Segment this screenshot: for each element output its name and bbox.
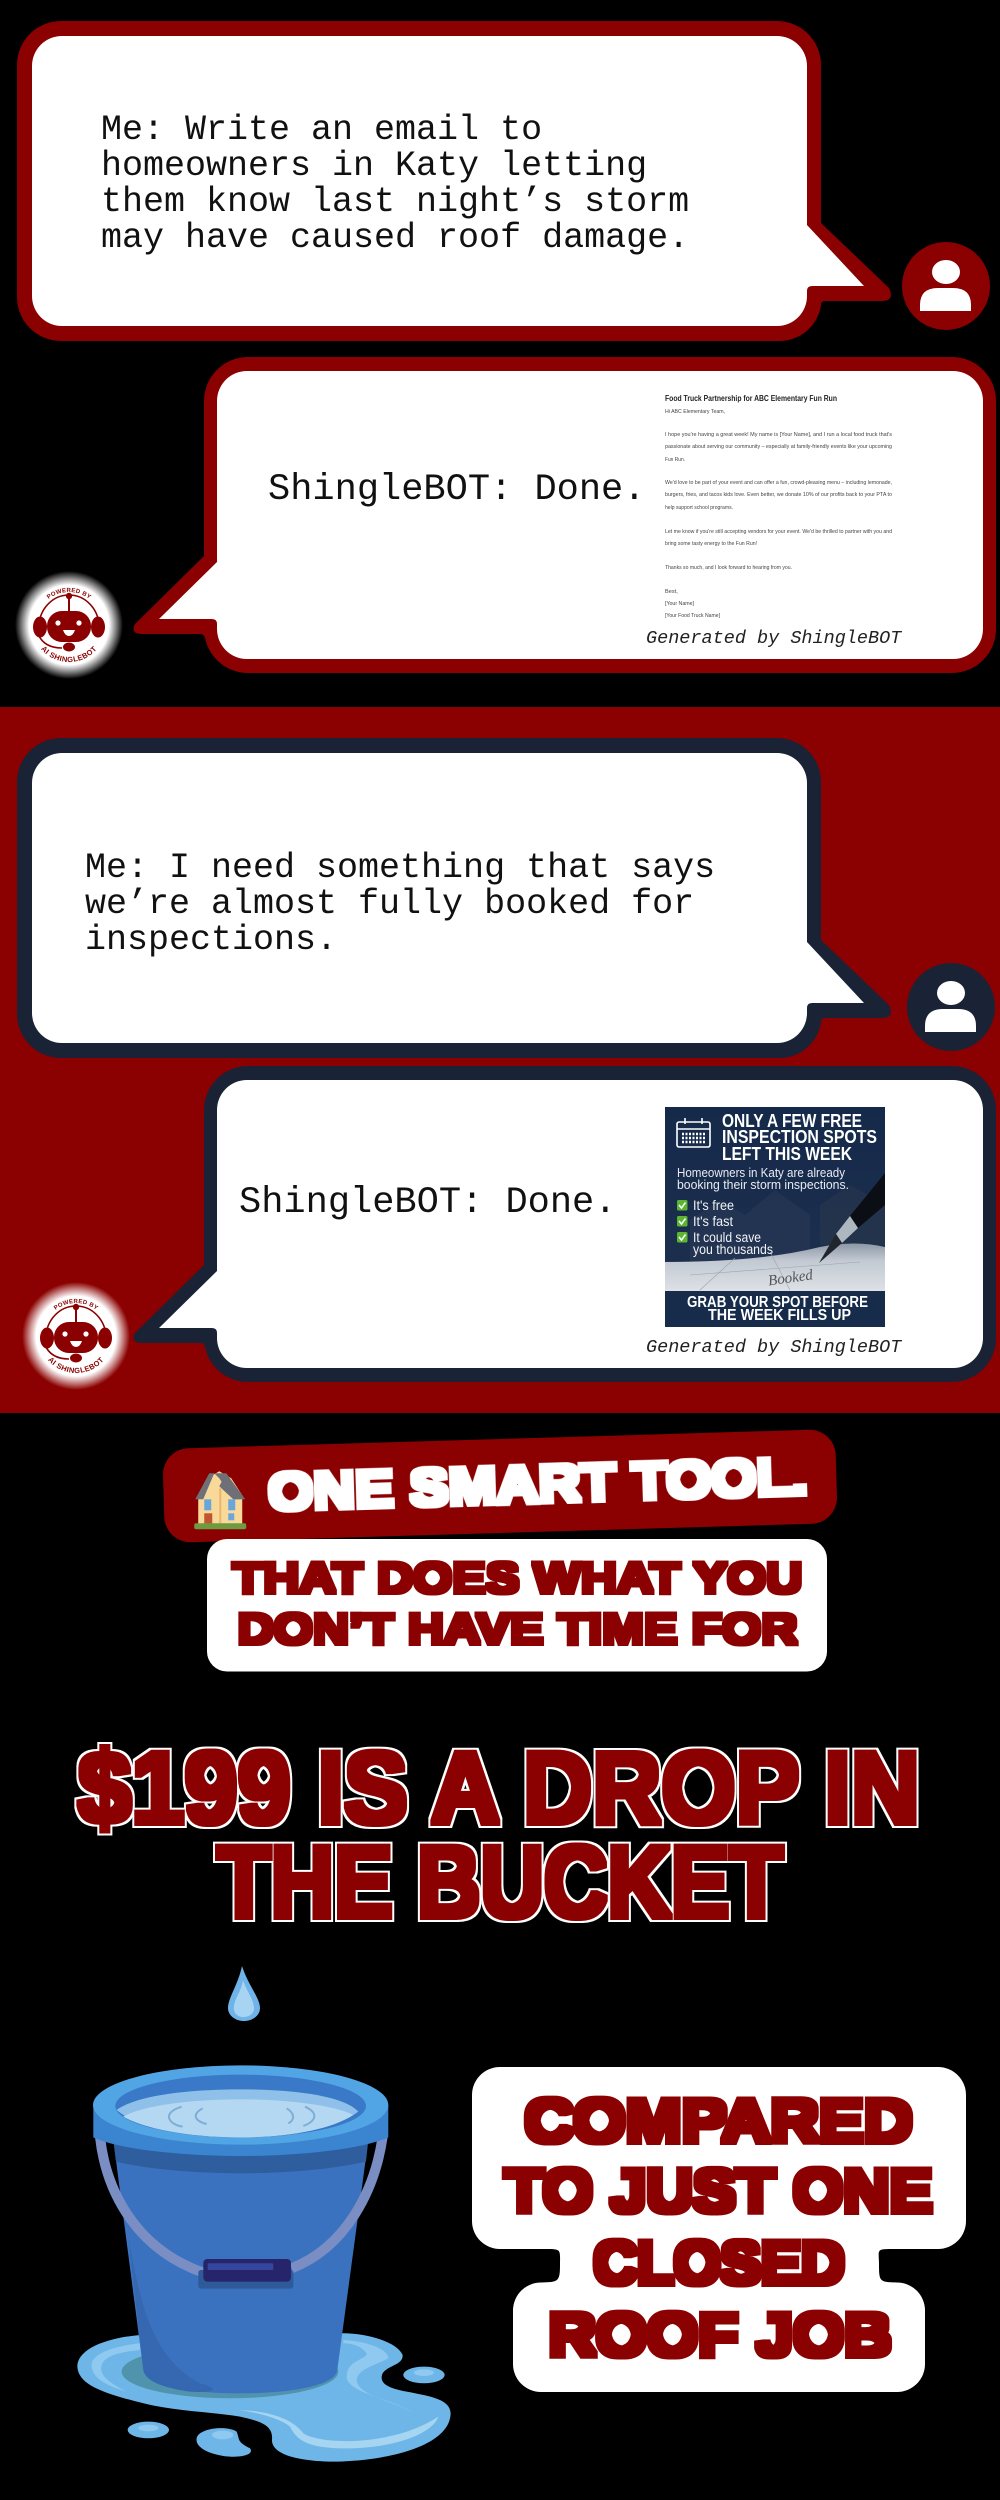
icon: ShingleBOT badge on red: AI SHINGLEBOT [48, 1356, 103, 1374]
callout: compared to one roof job [472, 2067, 966, 2392]
subtitle text [232, 1554, 802, 1654]
paper [665, 1244, 885, 1292]
ad image [665, 1107, 885, 1327]
email document: [Your Food Truck Name] [665, 613, 720, 619]
callout text: TO JUST ONE [504, 2158, 932, 2224]
icon: user avatar red [902, 242, 990, 330]
handwritten word: Booked [767, 1267, 814, 1289]
prompt text: inspections. [85, 920, 337, 960]
puddle [77, 2333, 451, 2462]
ad heading [722, 1110, 877, 1164]
heading: $199 is a drop in the bucket: $199 IS A DROP IN [78, 1731, 920, 1845]
ad call to action: THE WEEK FILLS UP [708, 1307, 851, 1324]
prompt text: homeowners in Katy letting [101, 146, 647, 186]
reply text: ShingleBOT: Done. [239, 1182, 616, 1224]
reply text: ShingleBOT: Done. [268, 469, 645, 511]
callout text: COMPARED [524, 2088, 912, 2154]
ad body [677, 1165, 849, 1192]
email document: help support school programs. [665, 505, 733, 511]
email document: passionate about serving our community – especially at family-friendly events like your upcoming [665, 444, 892, 450]
ad heading: INSPECTION SPOTS [722, 1126, 877, 1147]
rim top [93, 2065, 388, 2145]
email document: I hope you're having a great week! My name is [Your Name], and I run a local food truck that's [665, 432, 892, 438]
banner text: ONE SMART TOOL. [267, 1448, 809, 1522]
checklist: It's free [693, 1198, 734, 1213]
icon: ShingleBOT badge: AI SHINGLEBOT [41, 646, 96, 662]
ad body: Homeowners in Katy are already [677, 1165, 845, 1180]
email document [665, 394, 892, 619]
checklist: It's fast [693, 1214, 733, 1229]
speech bubble: ShingleBOT email reply [134, 357, 996, 673]
subtitle text: THAT DOES WHAT YOU [232, 1554, 802, 1602]
prompt text: Me: I need something that says [85, 848, 715, 888]
heading: $199 is a drop in the bucket [78, 1731, 920, 1939]
email document: Best, [665, 589, 678, 595]
calendar icon [677, 1118, 710, 1147]
ad call to action: GRAB YOUR SPOT BEFORE [687, 1294, 868, 1311]
clip [198, 2270, 293, 2289]
icon: ShingleBOT badge on red: POWERED BY [54, 1298, 98, 1310]
email document: [Your Name] [665, 601, 694, 607]
speech bubble: write an email [17, 21, 891, 341]
ad call to action [687, 1294, 868, 1324]
email document: Hi ABC Elementary Team, [665, 409, 725, 415]
pen [850, 1173, 885, 1228]
callout text [504, 2088, 932, 2368]
rim band [93, 2105, 388, 2156]
icon: house [194, 1471, 246, 1529]
bottom band [665, 1291, 885, 1327]
icon: ShingleBOT badge [16, 572, 122, 678]
caption: Generated by ShingleBOT [646, 1337, 902, 1358]
icon: bucket [93, 2065, 388, 2393]
prompt text: we’re almost fully booked for [85, 884, 694, 924]
banner: one smart tool [162, 1429, 838, 1543]
droplets [403, 2367, 445, 2383]
email document: Thanks so much, and I look forward to hearing from you. [665, 565, 792, 571]
checklist: you thousands [693, 1242, 773, 1257]
email document: Let me know if you're still accepting vendors for your event. We'd be thrilled to partner with you and [665, 529, 892, 535]
callout text: ROOF JOB [548, 2302, 892, 2368]
checklist [677, 1198, 773, 1257]
email document: Food Truck Partnership for ABC Elementary Fun Run [665, 394, 837, 403]
ad heading: LEFT THIS WEEK [722, 1143, 853, 1164]
speech bubble: ShingleBOT ad reply [134, 1066, 996, 1382]
speech bubble: fully booked [17, 738, 891, 1058]
caption: Generated by ShingleBOT [646, 628, 902, 649]
panel: red band background [0, 707, 1000, 1413]
water [117, 2089, 358, 2137]
prompt text: them know last night’s storm [101, 182, 689, 222]
ad heading: ONLY A FEW FREE [722, 1110, 862, 1131]
icon: ShingleBOT badge on red [22, 1282, 130, 1390]
prompt text: may have caused roof damage. [101, 218, 689, 258]
checklist: It could save [693, 1230, 761, 1245]
prompt text: Me: Write an email to [101, 110, 542, 150]
callout text: CLOSED [594, 2230, 844, 2296]
subtitle text: DON’T HAVE TIME FOR [238, 1606, 798, 1654]
ad body: booking their storm inspections. [677, 1177, 849, 1192]
icon: water drop [228, 1966, 260, 2021]
panel: white subtitle [207, 1539, 827, 1672]
icon: user avatar navy [907, 963, 995, 1051]
handle [100, 2137, 383, 2273]
faint houses [690, 1190, 810, 1262]
heading: $199 is a drop in the bucket: THE BUCKET [217, 1825, 783, 1939]
email document: We'd love to be part of your event and can offer a fun, crowd-pleasing menu – including lemonade, [665, 480, 892, 486]
email document: Fun Run. [665, 457, 685, 463]
email document: bring some tasty energy to the Fun Run! [665, 541, 757, 547]
icon: ShingleBOT badge: POWERED BY [46, 588, 92, 599]
email document: burgers, fries, and tacos kids love. Even better, we donate 10% of our profits back to your PTA to [665, 492, 892, 498]
bucket body [113, 2140, 368, 2393]
